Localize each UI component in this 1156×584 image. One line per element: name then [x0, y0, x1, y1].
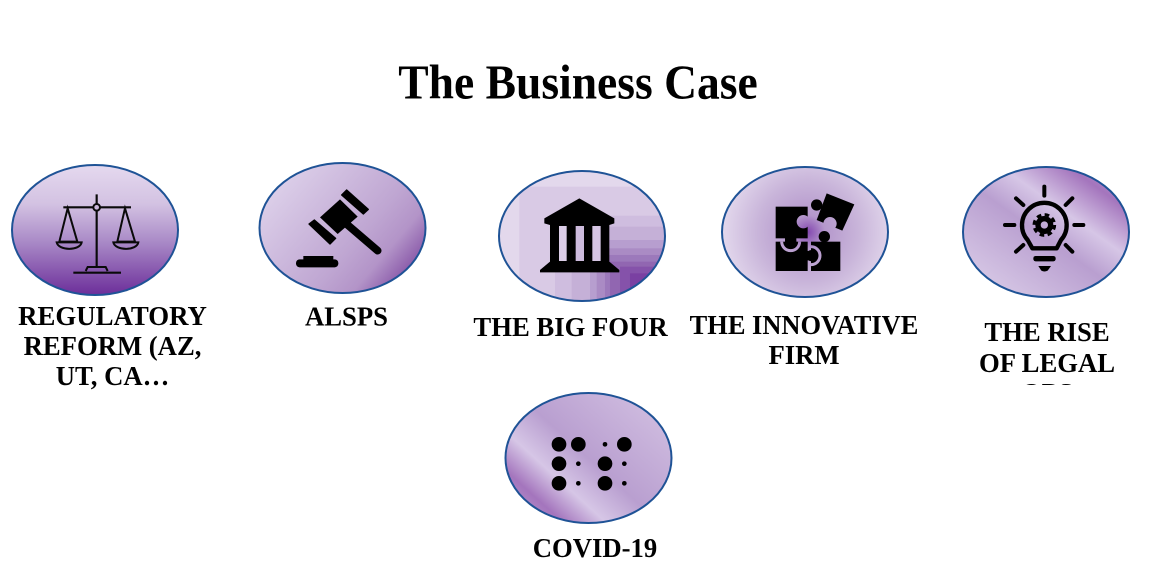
icon: scales of justice — [57, 194, 138, 273]
label: the innovative firm — [690, 309, 918, 370]
title: The Business Case — [398, 56, 758, 110]
oval with building icon — [498, 170, 666, 302]
icon: gavel — [296, 190, 378, 267]
icon: light bulb with gear — [1005, 187, 1083, 271]
label: the rise of legal ops: OPS — [1021, 378, 1073, 408]
label: regulatory reform: UT, CA… — [56, 361, 169, 391]
label: regulatory reform: REFORM (AZ, — [24, 331, 201, 361]
label: covid-19: COVID-19 — [533, 533, 657, 563]
label: the rise of legal ops — [980, 323, 1114, 385]
label: the rise of legal ops: OF LEGAL — [979, 348, 1115, 378]
label: alsps: ALSPS — [305, 301, 388, 332]
icon: bank building — [540, 198, 619, 272]
label: the big four: THE BIG FOUR — [473, 312, 668, 342]
label: the innovative firm: FIRM — [768, 340, 840, 370]
panel: the innovative firm — [690, 167, 918, 370]
panel: alsps — [260, 163, 426, 332]
oval with puzzle icon — [722, 167, 888, 297]
label: the rise of legal ops: THE RISE — [984, 317, 1110, 347]
panel: the big four — [474, 170, 668, 336]
label: regulatory reform: REGULATORY — [18, 301, 207, 331]
label: regulatory reform — [18, 301, 207, 391]
label: the innovative firm: THE INNOVATIVE — [690, 309, 918, 340]
panel: regulatory reform — [12, 165, 207, 391]
oval with braille dots icon — [506, 393, 672, 523]
oval with light bulb icon — [963, 167, 1129, 297]
oval with gavel icon — [260, 163, 426, 293]
icon: braille dots — [552, 437, 632, 491]
panel: covid-19 — [506, 393, 672, 563]
panel: the rise of legal ops — [963, 167, 1129, 408]
oval with scales icon — [12, 165, 178, 295]
icon: puzzle pieces — [776, 193, 854, 271]
